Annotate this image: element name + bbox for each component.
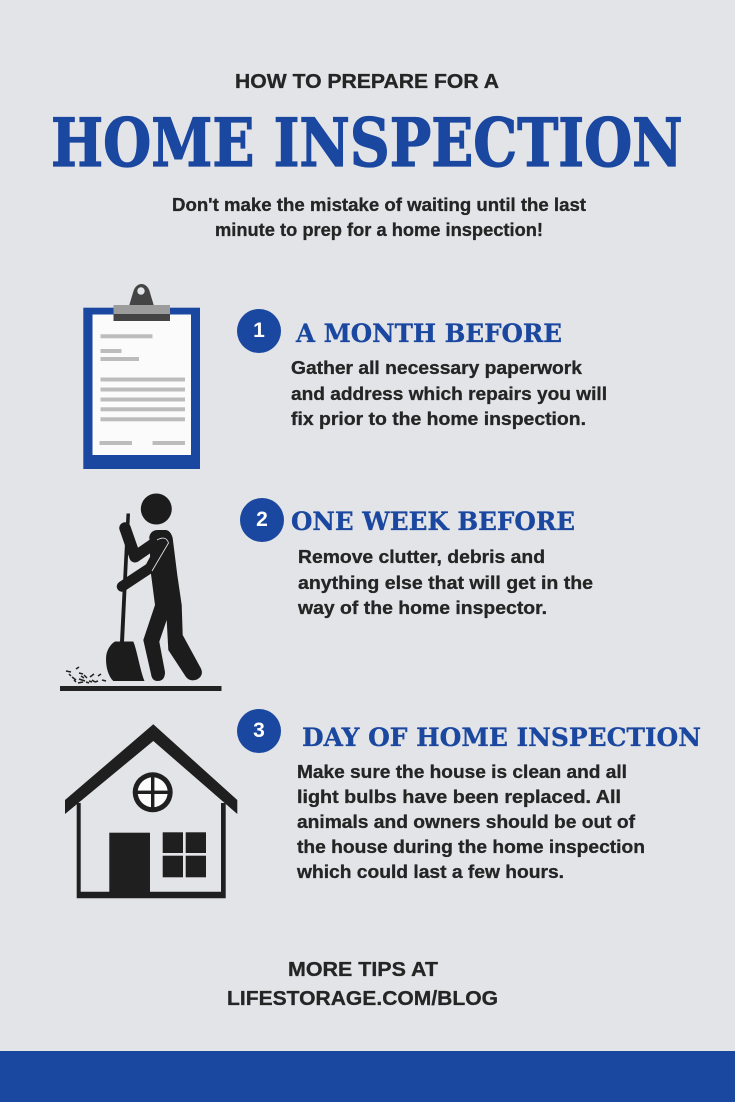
step 1 badge <box>237 309 281 353</box>
step 2 text <box>297 547 593 618</box>
intro text: minute to prep for a home inspection! <box>215 220 543 240</box>
intro text <box>172 195 586 240</box>
icon: house <box>65 724 237 898</box>
icon: person sweeping <box>60 494 222 691</box>
step 2 badge: 2 <box>256 508 268 531</box>
step 2 heading: ONE WEEK BEFORE <box>291 506 575 536</box>
step 1 text: and address which repairs you will <box>291 384 607 404</box>
step 2 badge <box>240 498 284 542</box>
kicker heading: HOW TO PREPARE FOR A <box>235 71 499 93</box>
step 1 heading: A MONTH BEFORE <box>295 318 562 348</box>
step 3 heading: DAY OF HOME INSPECTION <box>302 722 701 752</box>
icon: clipboard <box>83 284 200 469</box>
step 2 text: Remove clutter, debris and <box>298 547 545 567</box>
closing call to action: LIFESTORAGE.COM/BLOG <box>227 988 498 1010</box>
step 1 text <box>291 358 607 429</box>
footer bar <box>0 1051 735 1102</box>
closing call to action <box>227 959 498 1010</box>
step 2 text: anything else that will get in the <box>298 573 593 593</box>
step 3 text: animals and owners should be out of <box>297 812 636 832</box>
step 3 text: light bulbs have been replaced. All <box>297 787 621 807</box>
step 3 badge <box>237 709 281 753</box>
step 1 badge: 1 <box>253 319 265 342</box>
step 3 text <box>296 762 645 882</box>
step 1 text: fix prior to the home inspection. <box>291 409 586 429</box>
step 1 text: Gather all necessary paperwork <box>291 358 583 378</box>
step 3 text: which could last a few hours. <box>296 862 564 882</box>
closing call to action: MORE TIPS AT <box>288 959 438 981</box>
step 3 text: the house during the home inspection <box>297 837 645 857</box>
step 3 text: Make sure the house is clean and all <box>297 762 627 782</box>
step 3 badge: 3 <box>253 719 265 742</box>
step 2 text: way of the home inspector. <box>297 598 547 618</box>
title: HOME INSPECTION <box>51 105 683 182</box>
intro text: Don't make the mistake of waiting until the last <box>172 195 586 215</box>
